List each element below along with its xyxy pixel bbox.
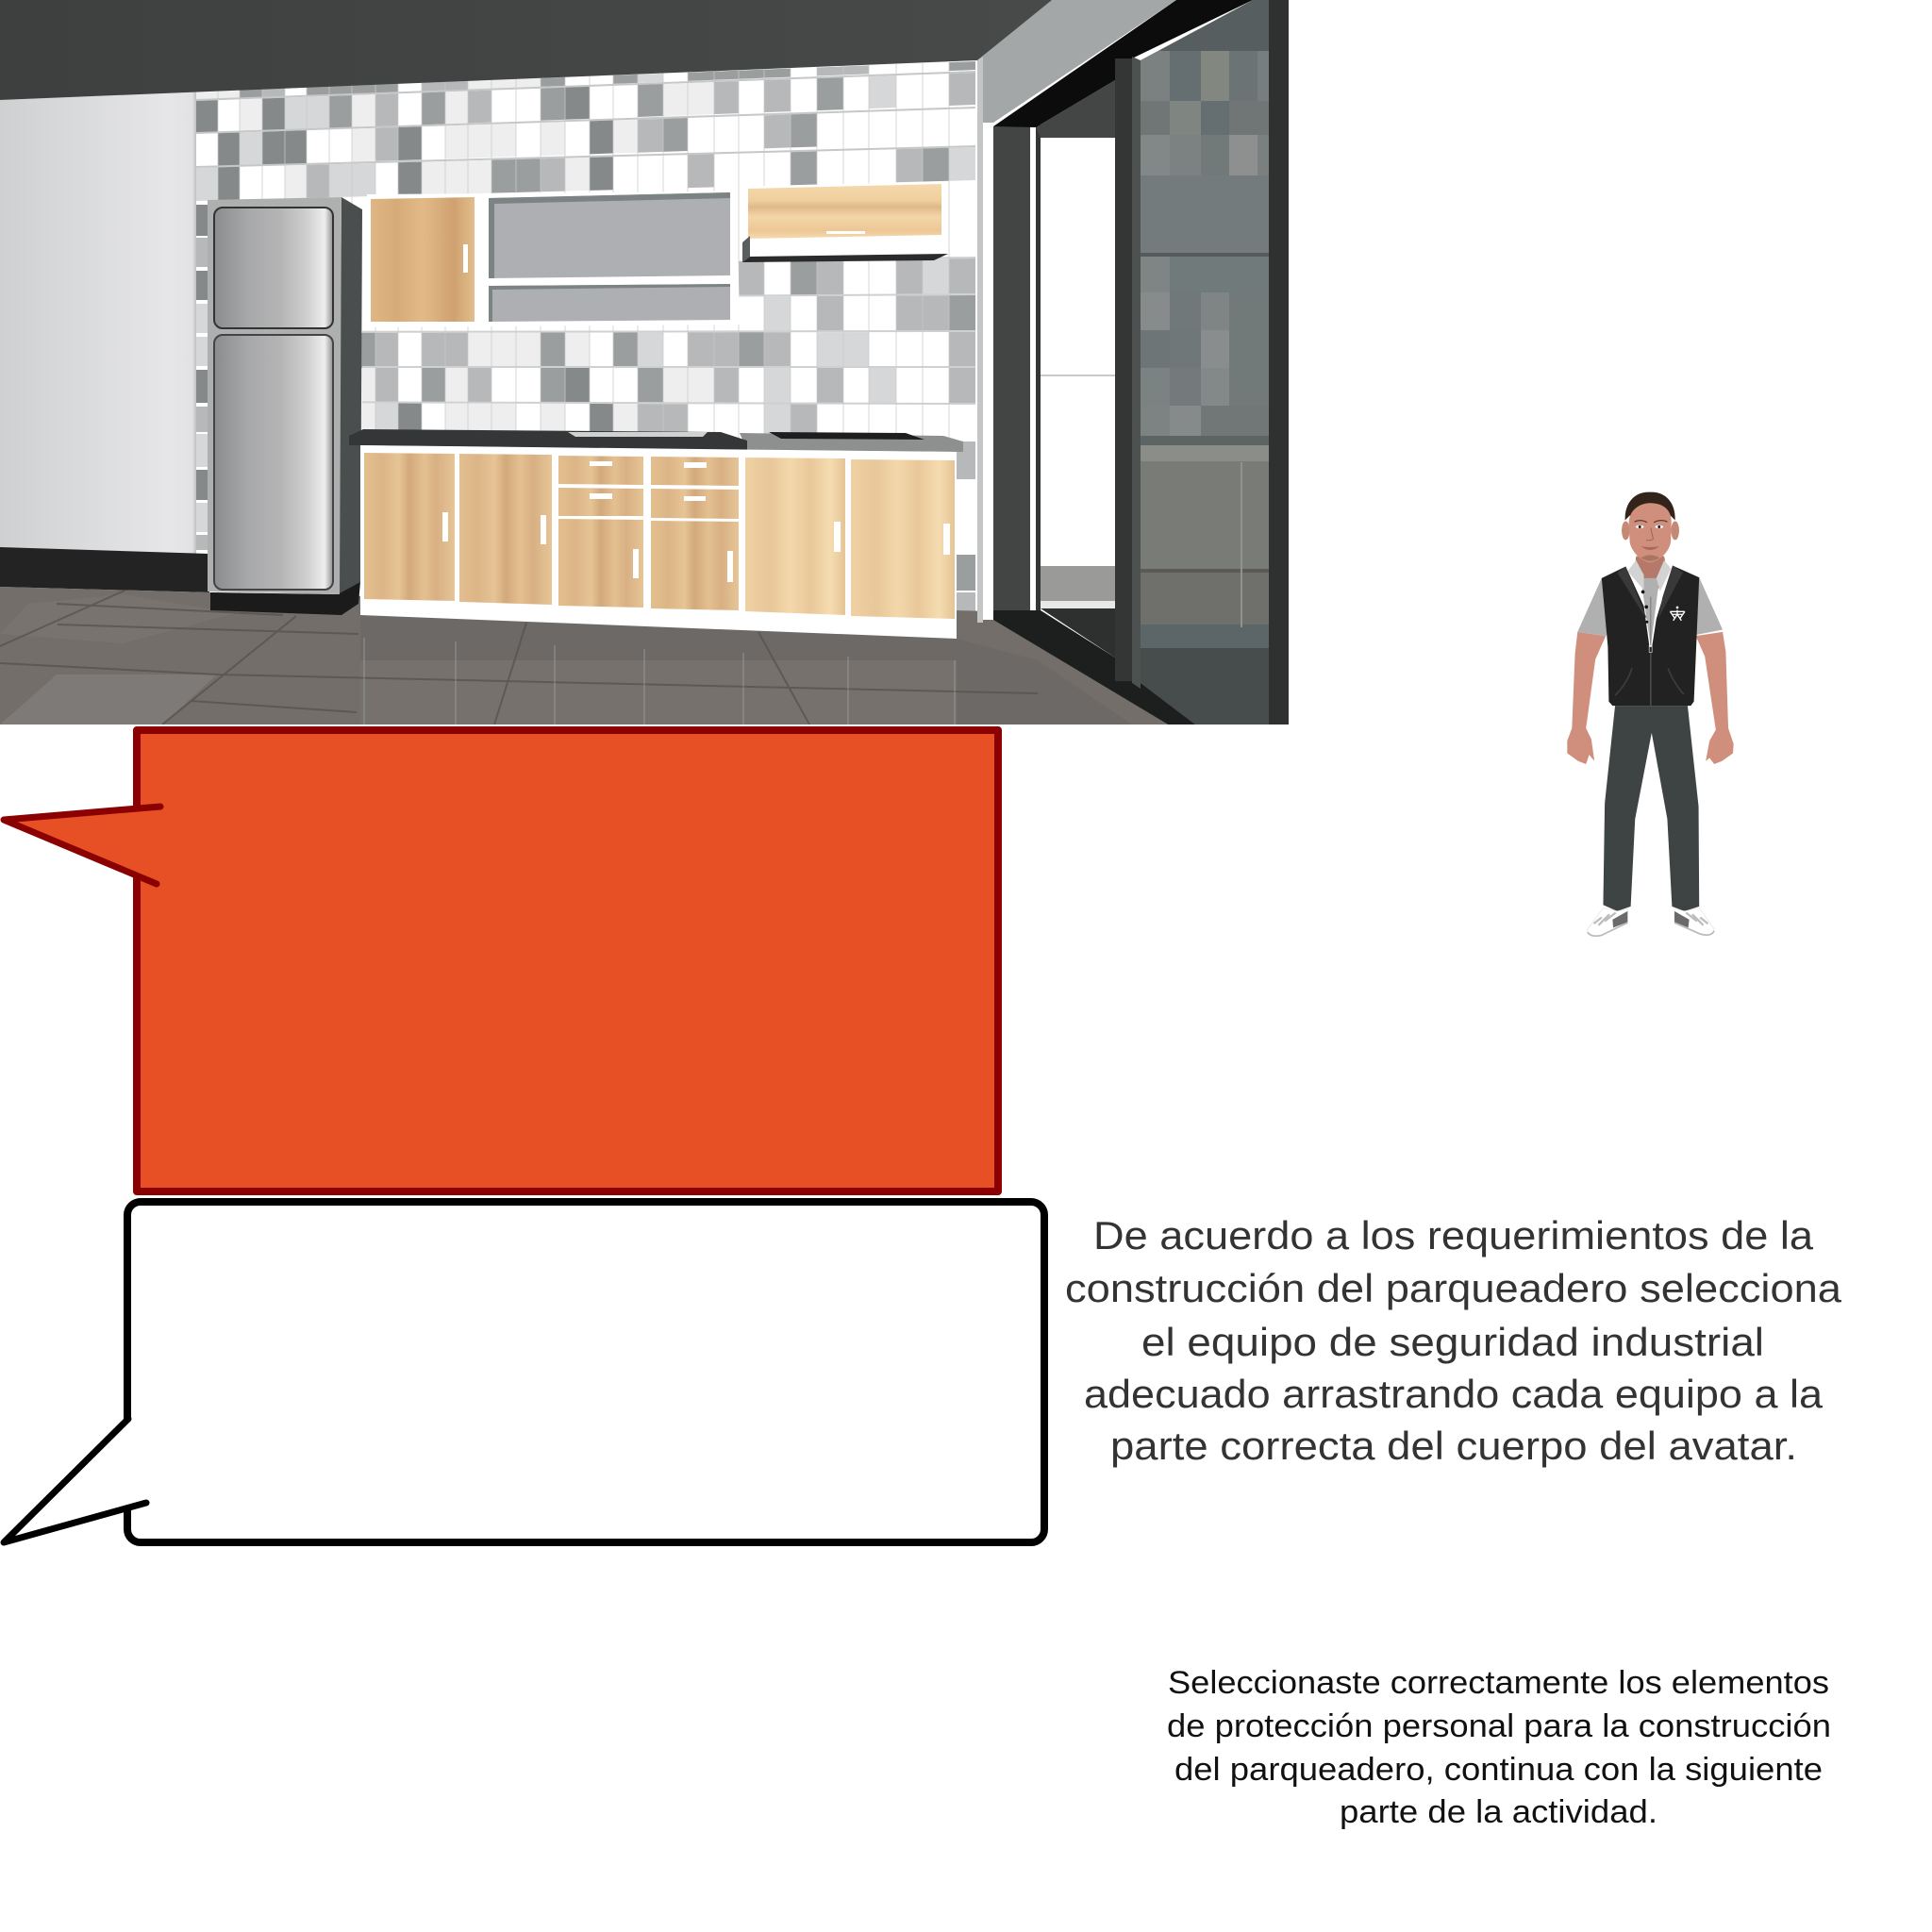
right shoe — [1674, 908, 1714, 935]
right arm and hand — [1696, 632, 1734, 764]
pants — [1603, 706, 1699, 911]
kitchen scene illustration — [0, 0, 1289, 731]
success message text: del parqueadero, continua con la siguiente — [1174, 1752, 1823, 1788]
upper cabinet with glass — [367, 192, 740, 327]
face — [1629, 503, 1672, 562]
ceiling — [0, 0, 1053, 100]
tiled back wall — [196, 60, 977, 623]
base cabinet — [360, 445, 957, 639]
skirting board — [0, 547, 209, 592]
panel: orange speech bubble — [4, 730, 998, 1191]
floor — [0, 587, 1189, 724]
success message text — [1167, 1665, 1831, 1830]
instruction text: De acuerdo a los requerimientos de la — [1093, 1213, 1814, 1257]
instruction text: construcción del parqueadero selecciona — [1065, 1266, 1842, 1310]
instruction text — [1065, 1213, 1842, 1468]
neck and shirt — [1627, 557, 1671, 647]
ears and hair — [1622, 492, 1679, 540]
countertop and sink — [349, 429, 963, 452]
upper right cabinet — [742, 181, 948, 262]
refrigerator — [208, 197, 362, 615]
ceiling side soffit — [977, 0, 1176, 123]
sleeves — [1577, 578, 1612, 636]
success message text: de protección personal para la construcción — [1167, 1708, 1831, 1744]
success message text: Seleccionaste correctamente los elementos — [1168, 1665, 1829, 1701]
left shoe — [1587, 908, 1627, 936]
sliding glass door — [977, 0, 1289, 731]
success message text: parte de la actividad. — [1340, 1794, 1657, 1830]
avatar character — [1567, 492, 1734, 937]
vest — [1602, 566, 1699, 706]
instruction text: el equipo de seguridad industrial — [1141, 1320, 1764, 1364]
instruction text: parte correcta del cuerpo del avatar. — [1110, 1424, 1797, 1468]
instruction text: adecuado arrastrando cada equipo a la — [1084, 1372, 1824, 1416]
left arm and hand — [1567, 632, 1606, 764]
left wall — [0, 92, 198, 604]
panel: white speech bubble — [4, 1202, 1044, 1542]
logo — [1670, 607, 1685, 621]
